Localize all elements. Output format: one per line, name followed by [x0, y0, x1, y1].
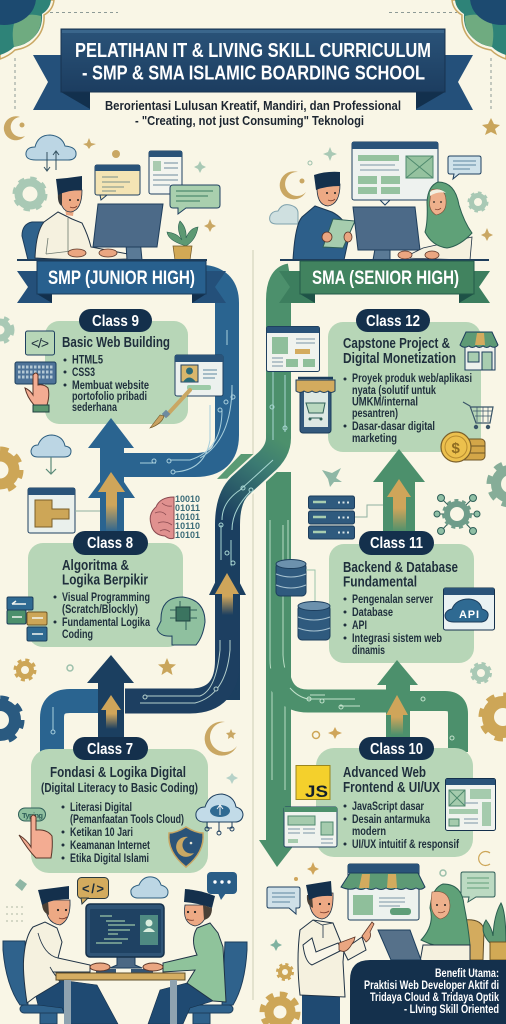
- icon: JS logo: JS: [305, 782, 328, 801]
- class 11 bullets: Pengenalan server: [352, 594, 433, 606]
- chair left: [3, 941, 78, 1024]
- icon: cloud network: [196, 794, 243, 835]
- icon: gear left gold: [0, 450, 20, 490]
- icon: keyboard: [15, 362, 56, 384]
- illustration: SMP student at computer: [15, 135, 220, 260]
- icon: shopping cart: [463, 402, 493, 429]
- chair right: [178, 942, 247, 1024]
- binary digits: 10101: [175, 512, 200, 522]
- pipe: green SMA main path: [259, 472, 310, 867]
- woman face: [431, 892, 450, 919]
- class 7 bullets: Keamanan Internet: [70, 840, 150, 852]
- icon: code tag box: </>: [31, 335, 49, 351]
- class 7 bullets: Etika Digital Islami: [70, 853, 149, 865]
- icon: scratch block window: [28, 488, 100, 533]
- monitor: [93, 204, 163, 260]
- class 8 title: Algoritma &: [62, 558, 129, 574]
- corner ornament top left: [0, 0, 54, 59]
- class 10 title: [343, 765, 440, 796]
- hands man: [322, 232, 352, 242]
- wireframe window: [352, 142, 438, 205]
- class 9 bullets: Membuat website: [72, 380, 149, 392]
- hands: [68, 249, 117, 257]
- icon: gear sage bottom: [472, 664, 490, 682]
- man arm: [343, 937, 366, 960]
- pipe: green crossing wedge: [217, 454, 264, 479]
- class 7 bullets: [62, 802, 184, 865]
- icon: teal sparkle: [322, 468, 342, 487]
- pants: [35, 980, 213, 1024]
- class 7 pill: Class 7: [87, 741, 133, 758]
- laptop: [378, 930, 421, 960]
- arrow: class 8 to class 9: [88, 418, 135, 535]
- cap man: [314, 172, 340, 190]
- woman hands: [398, 251, 439, 259]
- circle deco: [67, 665, 73, 671]
- icon: gear gold small: [15, 660, 35, 680]
- binary digits: 10101: [175, 530, 200, 540]
- man pants: [302, 995, 340, 1024]
- icon: coins: $: [452, 440, 460, 457]
- class 9 pill: Class 9: [92, 313, 139, 330]
- pipe: navy S-curve from SMA: [219, 276, 290, 700]
- icon: moon gold: [205, 722, 237, 756]
- man hands: [339, 922, 374, 951]
- class 11 title: Backend & Database: [343, 560, 458, 576]
- class 12 pill: [356, 309, 430, 332]
- chat bubble: [448, 156, 481, 179]
- icon: coins: [441, 432, 485, 462]
- icon: hand typing: Typing: [22, 811, 43, 820]
- class 8 bullets: Visual Programming: [62, 592, 150, 604]
- sparkle: [323, 147, 337, 161]
- class 11 bullets: Integrasi sistem web: [352, 633, 442, 645]
- class 12 bullets: [344, 373, 472, 445]
- icon: gear right sage: [490, 464, 506, 504]
- code window yellow: [95, 165, 140, 200]
- icon: API window: [444, 588, 494, 630]
- subtitle: - "Creating, not just Consuming" Teknologi: [135, 113, 364, 128]
- man collar placket: [313, 920, 333, 938]
- plant: [167, 221, 198, 260]
- body: [35, 212, 128, 260]
- class 8 bullets: (Scratch/Blockly): [62, 604, 138, 616]
- class 7 bullets: Literasi Digital: [70, 802, 132, 814]
- icon: star right: [482, 118, 500, 135]
- bubble left: [267, 887, 300, 914]
- plant: [483, 903, 506, 960]
- class 11 bullets: API: [352, 620, 367, 632]
- monitor: [86, 904, 164, 968]
- hijab: [425, 182, 472, 248]
- panel: class 7: [31, 737, 208, 873]
- class 9 pill: [79, 309, 152, 332]
- class 12 bullets: Proyek produk web/aplikasi: [352, 373, 472, 385]
- arrow: class 10 to class 11: [377, 660, 418, 745]
- binary digits: 01011: [175, 503, 200, 513]
- woman face: [430, 189, 446, 215]
- cap left: [38, 886, 69, 905]
- circle decorations: [312, 732, 490, 876]
- class 12 bullets: Dasar-dasar digital: [352, 421, 435, 433]
- class 11 pill: [359, 531, 434, 555]
- icon: database 1: [276, 560, 315, 602]
- class 11 title: [343, 560, 458, 590]
- icon: gear navy left: [0, 699, 21, 741]
- class 11 bullets: dinamis: [352, 645, 385, 657]
- head man: [317, 184, 340, 206]
- chair: [22, 222, 45, 260]
- icon: wireframe window left: [284, 807, 337, 847]
- sparkle green: [226, 773, 238, 784]
- class 8 pill: Class 8: [87, 535, 133, 552]
- chat bubble green: [170, 185, 220, 214]
- panel: class 11: [329, 531, 474, 663]
- class 10 bullets: modern: [352, 826, 386, 838]
- icon: chat bubble dots: [207, 872, 237, 900]
- binary digits: 10110: [175, 521, 200, 531]
- class 10 bullets: [344, 801, 459, 851]
- class 8 bullets: Fundamental Logika: [62, 617, 150, 629]
- class 7 bullets: Ketikan 10 Jari: [70, 827, 133, 839]
- bubble right: [461, 872, 495, 902]
- icon: storefront: [460, 332, 498, 370]
- class 9 bullets: [64, 354, 149, 414]
- blob: [15, 879, 27, 891]
- ribbon: SMP: SMP (JUNIOR HIGH): [48, 268, 195, 289]
- class 12 title: [343, 336, 456, 367]
- class 10 pill: Class 10: [370, 741, 423, 758]
- tablet: [323, 219, 355, 248]
- arm detail left: [38, 933, 58, 972]
- desk line: [17, 259, 207, 261]
- icon: shield moon: [169, 827, 203, 867]
- woman body: [403, 237, 472, 260]
- ribbon: SMA: [279, 261, 490, 303]
- title text: - SMP & SMA ISLAMIC BOARDING SCHOOL: [82, 62, 425, 84]
- arrow up: navy inner arrow: [209, 558, 246, 615]
- man body: [298, 920, 345, 997]
- icon: code blocks: [7, 597, 47, 641]
- illustration: shop and presenters: [263, 864, 506, 1024]
- class 7 pill: [73, 737, 148, 760]
- icon: code bubble: </>: [82, 881, 104, 896]
- class 10 bullets: JavaScript dasar: [352, 801, 424, 813]
- icon: JS logo: [296, 766, 330, 801]
- man head: [307, 893, 333, 919]
- panel: class 10: [316, 737, 473, 857]
- icon: API window: API: [459, 609, 479, 621]
- class 12 title: Digital Monetization: [343, 351, 456, 367]
- class 10 bullets: Desain antarmuka: [352, 814, 430, 826]
- head left: [42, 900, 70, 925]
- icon: gear gold bottom: [263, 995, 297, 1024]
- hands and keyboards: [90, 963, 163, 973]
- icon: gear left sage: [0, 318, 12, 342]
- icon: network gear: [434, 494, 480, 534]
- icon: phone shop: [296, 378, 335, 433]
- class 10 bullets: UI/UX intuitif & responsif: [352, 839, 459, 851]
- ribbon: SMP: [17, 261, 226, 303]
- class 7 title: (Digital Literacy to Basic Coding): [41, 781, 198, 795]
- panel: class 9: [45, 309, 188, 424]
- class 7 title: [41, 765, 198, 795]
- icon: gear gold: [278, 964, 292, 980]
- arrow: class 11 to class 12: [373, 449, 425, 540]
- arrow: class 7 to class 8: [51, 655, 134, 752]
- shop window: [348, 864, 419, 920]
- cap: [56, 176, 82, 195]
- class 12 bullets: pesantren): [352, 408, 398, 420]
- corner ornament top right: [452, 0, 506, 59]
- illustration: SMA students: [270, 142, 493, 260]
- desk: [56, 973, 185, 1024]
- title text: [75, 40, 431, 84]
- icon: gear: [15, 179, 45, 209]
- panel: class 12: [328, 309, 481, 452]
- icon: cloud download: [31, 435, 71, 474]
- icon: pointing hand: [25, 373, 49, 412]
- chair: [463, 920, 484, 960]
- pipe: green branch into class 11: [278, 668, 458, 752]
- icon: moon: [280, 171, 306, 199]
- document window: [149, 151, 182, 194]
- class 12 title: Capstone Project &: [343, 336, 450, 352]
- icon: servers: [308, 496, 383, 539]
- sparkles: [83, 138, 216, 232]
- monitor: [353, 207, 420, 260]
- class 9 bullets: HTML5: [72, 354, 103, 366]
- pipe: navy bottom branch: [125, 620, 230, 703]
- class 8 title: Logika Berpikir: [62, 572, 148, 588]
- hijab: [421, 884, 470, 948]
- head right: [184, 905, 212, 926]
- man forearm: [303, 938, 342, 965]
- icon: brain: [150, 497, 174, 539]
- sparkle green: [194, 161, 206, 173]
- ribbon: SMA: SMA (SENIOR HIGH): [312, 268, 459, 289]
- icon: wireframe window right: [446, 778, 496, 830]
- dashed frame lines: [15, 12, 491, 112]
- cap right: [184, 889, 215, 908]
- icon: cloud upload: [26, 135, 76, 171]
- sparkle gold: [481, 228, 493, 241]
- icon: website wireframe: [266, 326, 320, 372]
- body left: [23, 922, 90, 1003]
- class 12 bullets: marketing: [352, 433, 397, 445]
- binary digits: [175, 494, 200, 540]
- icon: paintbrush: [150, 390, 190, 428]
- panel: class 8: [28, 531, 183, 647]
- awning: [341, 873, 425, 890]
- icon: code bubble: [78, 878, 108, 904]
- icon: database 2: [298, 602, 330, 640]
- class 10 pill: [359, 737, 434, 760]
- icon: gear gold right: [482, 696, 506, 738]
- head: [58, 190, 82, 216]
- icon: hand typing: [18, 808, 52, 858]
- class 12 bullets: UMKM/internal: [352, 396, 418, 408]
- class 9 bullets: sederhana: [72, 402, 117, 414]
- man cap: [306, 881, 332, 900]
- woman body: [420, 945, 470, 962]
- subtitle: Berorientasi Lulusan Kreatif, Mandiri, dan Professional: [105, 98, 401, 113]
- center divider: [252, 250, 254, 1000]
- class 8 pill: [73, 531, 148, 555]
- body right: [163, 923, 226, 1002]
- desk line: [280, 259, 489, 261]
- class 11 bullets: [344, 594, 442, 657]
- awning gold stripes: [359, 874, 397, 888]
- icon: AI head: [157, 597, 205, 645]
- title ribbon: [33, 29, 473, 110]
- pipe: blue SMP path: [120, 277, 235, 474]
- class 9 title: Basic Web Building: [62, 335, 170, 351]
- class 9 bullets: portofolio pribadi: [72, 391, 147, 403]
- class 12 bullets: nyata (solutif untuk: [352, 385, 436, 397]
- class 11 title: Fundamental: [343, 574, 417, 590]
- class 11 bullets: Database: [352, 607, 393, 619]
- icon: cloud: [131, 877, 168, 898]
- subtitle: [105, 98, 401, 128]
- class 7 title: Fondasi & Logika Digital: [50, 765, 186, 781]
- icon: star gold: [158, 658, 176, 675]
- class 8 bullets: [54, 592, 150, 641]
- sparkle: [270, 939, 282, 951]
- class 8 bullets: Coding: [62, 629, 93, 641]
- class 10 title: Frontend & UI/UX: [343, 780, 440, 796]
- benefit callout: [350, 960, 506, 1024]
- icon: gear: [469, 193, 487, 211]
- icon: code tag box: [26, 331, 54, 355]
- class 7 bullets: (Pemanfaatan Tools Cloud): [70, 814, 184, 826]
- circle decoration: [308, 161, 312, 165]
- body man: [293, 206, 350, 260]
- cloud: [270, 205, 298, 224]
- arm detail: [46, 218, 80, 254]
- icon: profile window: [175, 355, 223, 396]
- icon: moon left: [4, 116, 25, 140]
- icon: sparkle gold: [294, 727, 342, 881]
- illustration: two boys coding: [3, 886, 247, 1024]
- class 8 title: [62, 558, 148, 588]
- class 9 bullets: CSS3: [72, 367, 95, 379]
- class 11 pill: Class 11: [370, 535, 423, 552]
- class 12 pill: Class 12: [366, 313, 420, 330]
- title text: PELATIHAN IT & LIVING SKILL CURRICULUM: [75, 40, 431, 62]
- binary digits: 10010: [175, 494, 200, 504]
- class 10 title: Advanced Web: [343, 765, 426, 781]
- dot grid: [6, 906, 23, 922]
